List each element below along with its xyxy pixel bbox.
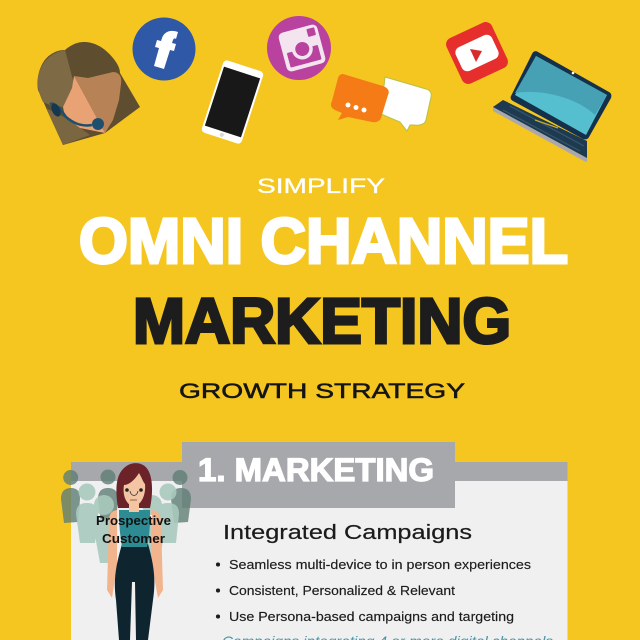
- icon: facebook: [132, 18, 196, 80]
- bullet list: Seamless multi-device to in person experiences: [229, 557, 532, 572]
- label: prospective customer: Customer: [102, 532, 165, 546]
- label: prospective customer: [96, 514, 171, 546]
- icon: video play: [444, 20, 510, 86]
- title: marketing: MARKETING: [133, 285, 511, 357]
- bullet list: [216, 557, 532, 624]
- icon: laptop: [493, 51, 611, 162]
- panel background: [71, 462, 568, 640]
- bullet list: Consistent, Personalized & Relevant: [229, 583, 455, 598]
- crowd of people: [61, 470, 191, 563]
- grey band: [71, 462, 568, 481]
- title: omni channel: OMNI CHANNEL: [79, 205, 568, 277]
- section heading: [182, 442, 455, 508]
- bullet list: Use Persona-based campaigns and targeting: [229, 609, 514, 624]
- white chat bubble: [381, 77, 431, 131]
- heading: integrated campaigns: Integrated Campaigns: [223, 522, 472, 544]
- icon: instagram: [267, 16, 331, 80]
- woman: prospective customer: [107, 463, 163, 640]
- subtitle: growth strategy: GROWTH STRATEGY: [179, 380, 465, 403]
- panel: marketing section: [61, 442, 568, 640]
- icon: call-centre agent with headset: [38, 42, 140, 145]
- icon: chat bubbles: [331, 74, 431, 131]
- section heading: 1. MARKETING: [198, 452, 434, 488]
- orange chat bubble: [331, 74, 389, 122]
- label: prospective customer: Prospective: [96, 514, 171, 528]
- subtitle: simplify: SIMPLIFY: [257, 175, 385, 198]
- icon: smartphone: [201, 59, 264, 145]
